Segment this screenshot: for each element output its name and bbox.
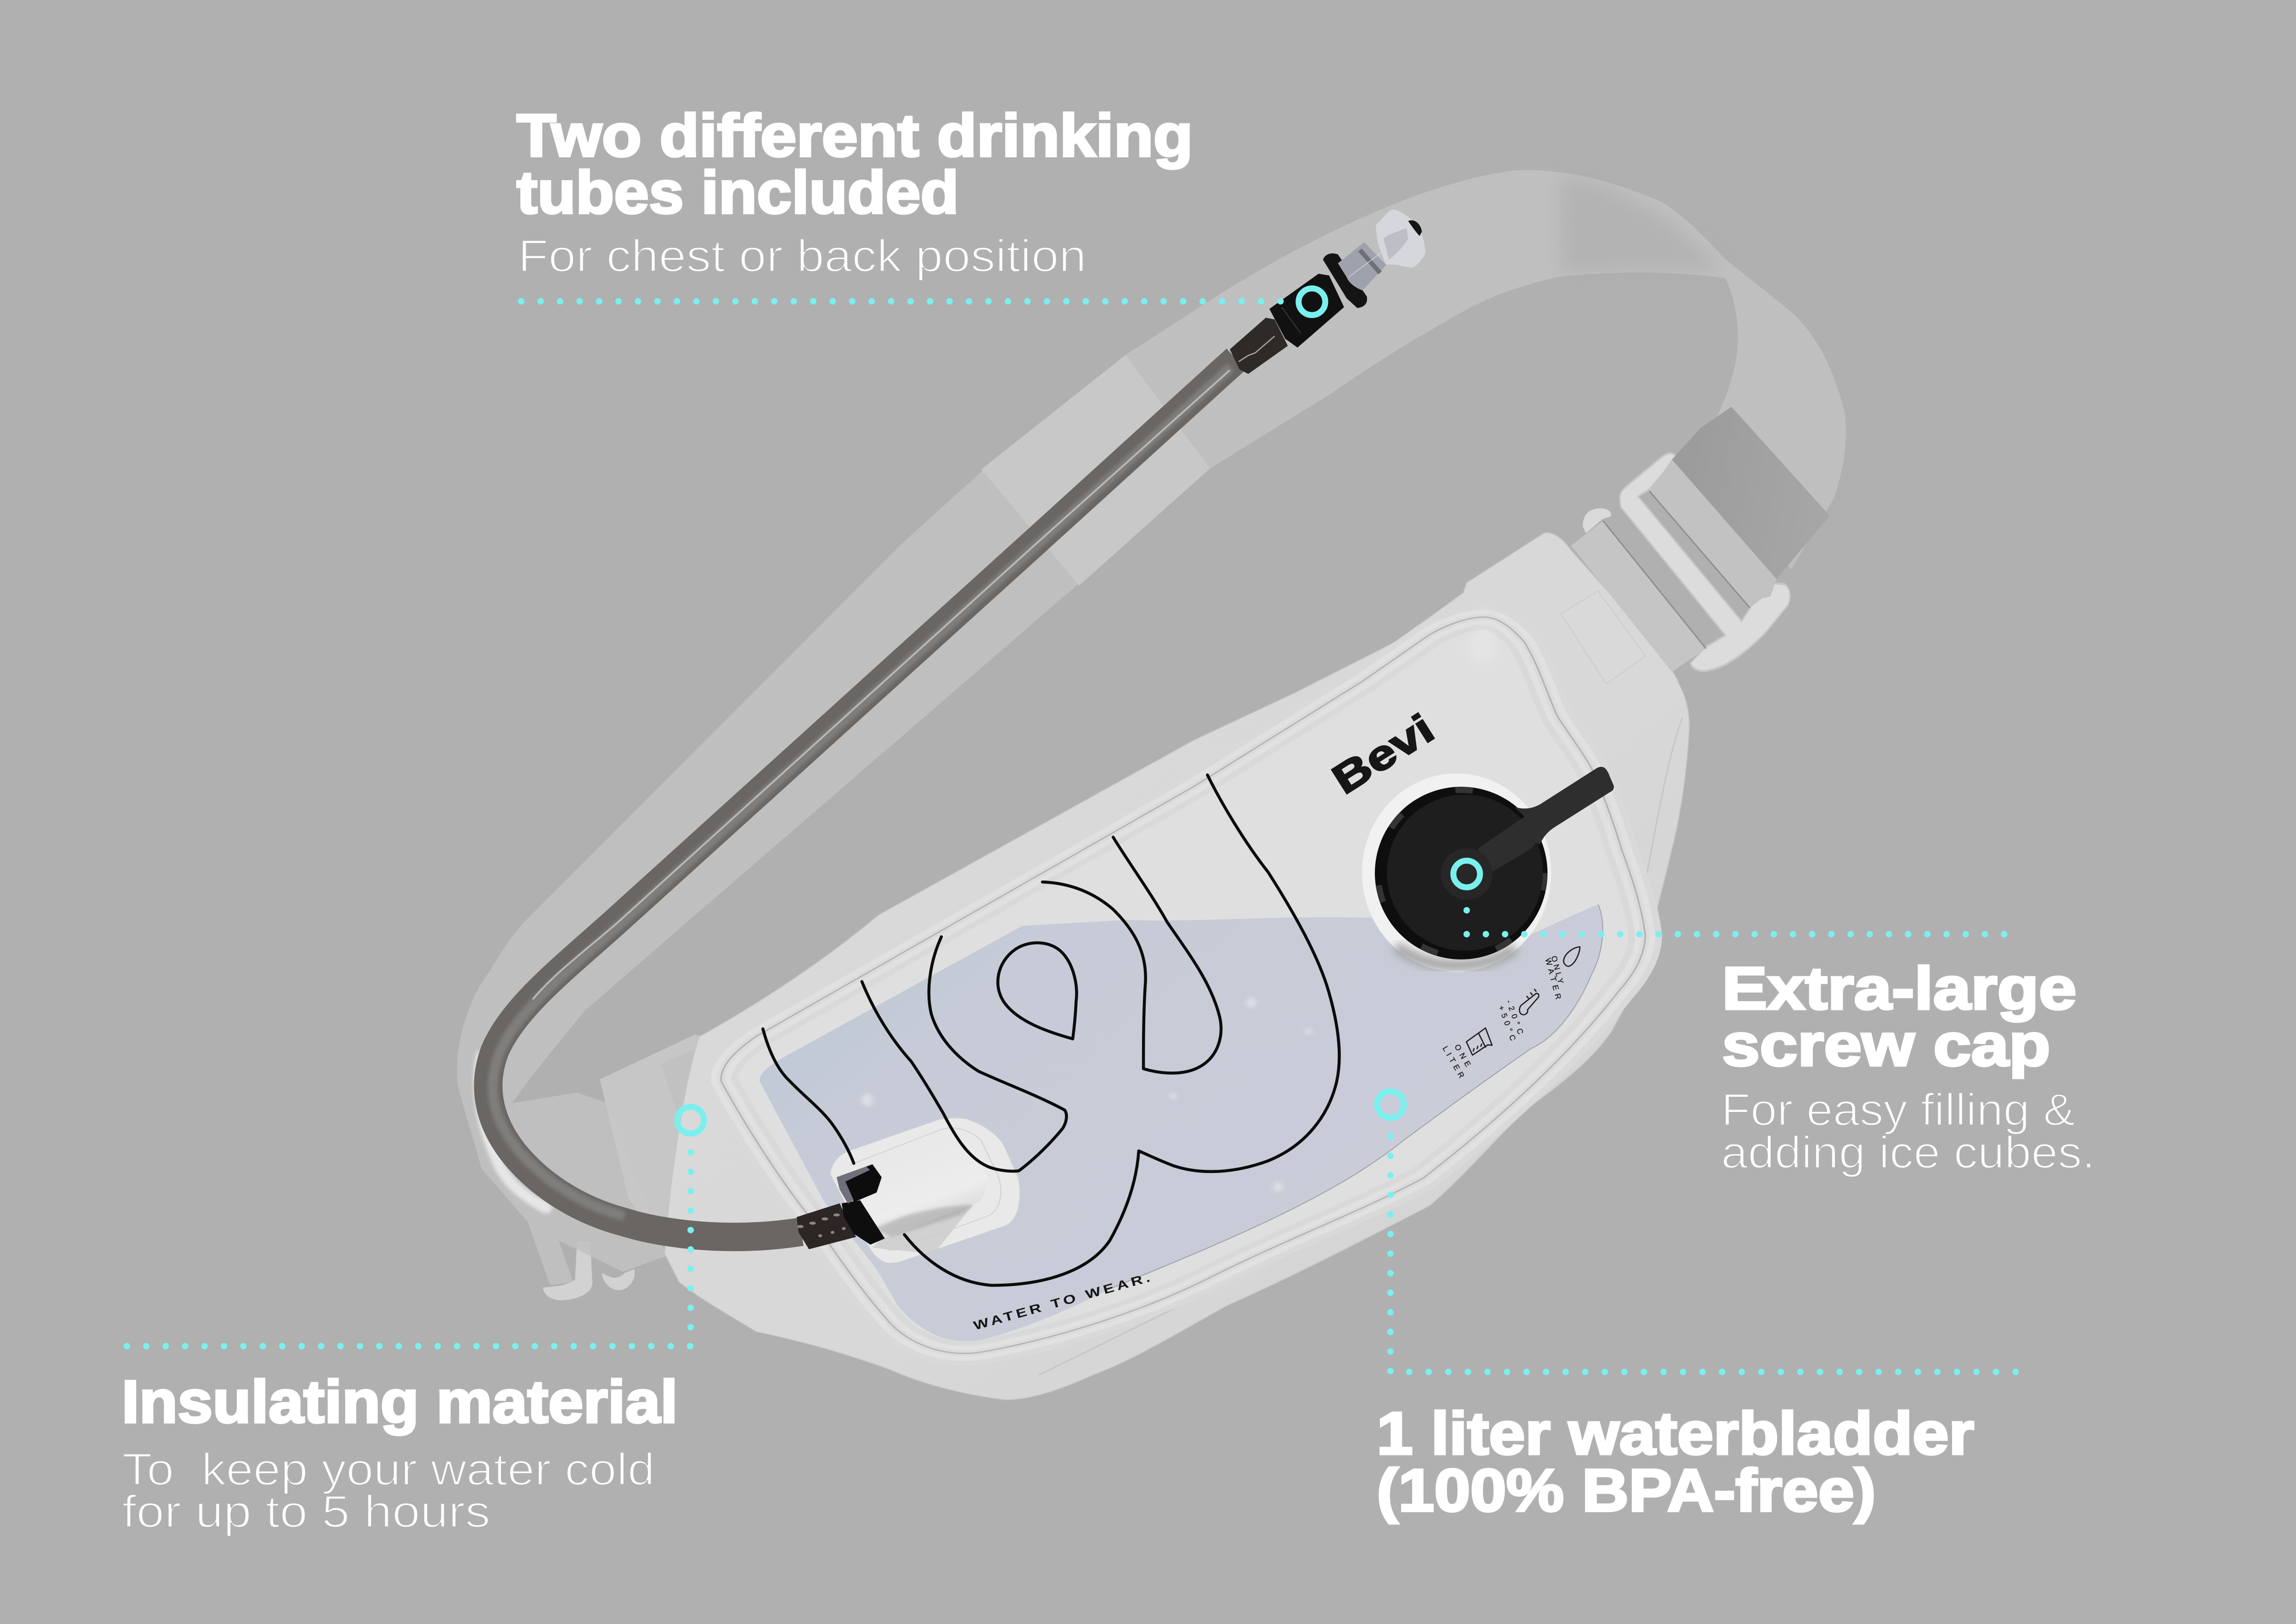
marker ring	[1299, 288, 1325, 315]
collar shade	[1396, 946, 1515, 965]
subtext	[1721, 1084, 2095, 1178]
dark folded patch	[1672, 407, 1830, 579]
tube reflection	[479, 1056, 546, 1208]
heading: Insulating material	[122, 1368, 678, 1435]
port seal ridges	[850, 1128, 1001, 1250]
slogan: WATER TO WEAR.	[972, 1270, 1154, 1333]
marker ring	[1377, 1091, 1404, 1118]
rib highlights	[797, 1213, 846, 1237]
collar	[842, 1200, 885, 1245]
dotted leader	[521, 298, 1286, 304]
heading: Two different drinking	[517, 102, 1193, 169]
screw cap	[1362, 767, 1614, 972]
ribbed sleeve	[797, 1203, 856, 1249]
upper tube connector and bite valve	[1230, 209, 1426, 374]
inner rim shading	[1039, 718, 1683, 1375]
cap disc outer	[1375, 787, 1548, 959]
buckle frame	[1620, 453, 1790, 671]
heading: 1 liter waterbladder	[1377, 1399, 1974, 1467]
temperature label	[1497, 999, 1525, 1042]
tube body	[488, 359, 1236, 1237]
bag tab	[600, 1035, 798, 1243]
port seal shadow	[872, 1205, 973, 1254]
flange	[1323, 254, 1367, 308]
one liter label: LITER	[1441, 1044, 1466, 1080]
cap disc face	[1387, 795, 1543, 951]
clip side	[837, 1167, 870, 1204]
heading: screw cap	[1722, 1011, 2050, 1078]
one liter label: ONE	[1453, 1043, 1472, 1068]
temperature label: -20°C	[1504, 999, 1525, 1036]
marker ring	[1453, 861, 1480, 887]
callout: two drinking tubes	[517, 102, 1325, 315]
port body	[861, 1143, 987, 1237]
port body shade	[874, 1205, 973, 1237]
water droplets	[862, 998, 1312, 1192]
bite core	[1384, 228, 1408, 259]
hinge hub	[1441, 848, 1492, 900]
window corner highlight	[1469, 628, 1496, 663]
tube highlight	[493, 367, 1231, 1216]
subtext	[122, 1444, 655, 1537]
cap collar	[1362, 773, 1551, 972]
ribbed sleeve	[1230, 318, 1288, 374]
strap through buckle	[1649, 460, 1777, 608]
darker folded strap section	[1561, 177, 1722, 273]
swirl line over port	[862, 937, 1066, 1171]
subtext: adding ice cubes.	[1721, 1127, 2095, 1178]
callout: waterbladder	[1377, 1091, 2017, 1524]
heading	[1722, 954, 2077, 1078]
heading: Extra-large	[1722, 954, 2077, 1022]
tube port seal	[830, 1118, 1020, 1263]
bladder outline	[1106, 904, 1603, 1290]
left buckle and translucent end pieces	[512, 1035, 798, 1300]
subtext: To keep your water cold	[122, 1444, 655, 1494]
strap tail piece	[512, 1093, 666, 1272]
clear valve	[1338, 242, 1386, 290]
heading	[517, 102, 1193, 226]
small hook	[1583, 508, 1611, 533]
tip end	[1408, 220, 1422, 236]
subtext: For easy filling &	[1721, 1084, 2075, 1135]
icon: water drop	[1564, 947, 1580, 966]
heading	[1377, 1399, 1974, 1524]
heading: (100% BPA-free)	[1377, 1456, 1876, 1524]
clip	[837, 1164, 882, 1202]
hooks	[543, 1241, 635, 1300]
brand logo: Bevi	[1324, 705, 1442, 803]
strap reinforcement patch	[981, 355, 1210, 586]
temperature label: +50°C	[1497, 1004, 1517, 1042]
black coupling	[1269, 274, 1344, 348]
belt strap	[457, 170, 1846, 1285]
window panel with welded seal	[721, 617, 1645, 1353]
callout: screw cap	[1453, 861, 2095, 1178]
waist pack body	[664, 533, 1689, 1400]
lower tube connector	[797, 1143, 987, 1249]
right buckle and strap end	[1583, 407, 1830, 671]
rear strap tab on pack	[1561, 591, 1645, 684]
dotted leader	[1463, 907, 2007, 934]
heading: tubes included	[517, 158, 959, 226]
lower strap at right buckle	[1571, 521, 1706, 672]
water in bladder	[760, 904, 1603, 1341]
icon: thermometer	[1519, 989, 1539, 1015]
marker ring	[677, 1107, 704, 1133]
cap handle	[1478, 767, 1614, 873]
line logo swirl	[763, 775, 1339, 1286]
bite tip	[1376, 209, 1426, 268]
icon: beaker	[1466, 1028, 1492, 1055]
subtext: For chest or back position	[518, 231, 1086, 281]
dotted leader	[120, 1152, 691, 1346]
pack outer shell	[664, 533, 1689, 1400]
only water label: WATER	[1543, 957, 1563, 1000]
callout: insulating material	[120, 1107, 704, 1537]
drinking tube	[479, 359, 1236, 1237]
only water label: ONLY	[1549, 955, 1565, 985]
subtext: for up to 5 hours	[122, 1486, 490, 1537]
dotted leader	[1390, 1136, 2017, 1372]
usage icons on bladder	[1441, 947, 1580, 1080]
